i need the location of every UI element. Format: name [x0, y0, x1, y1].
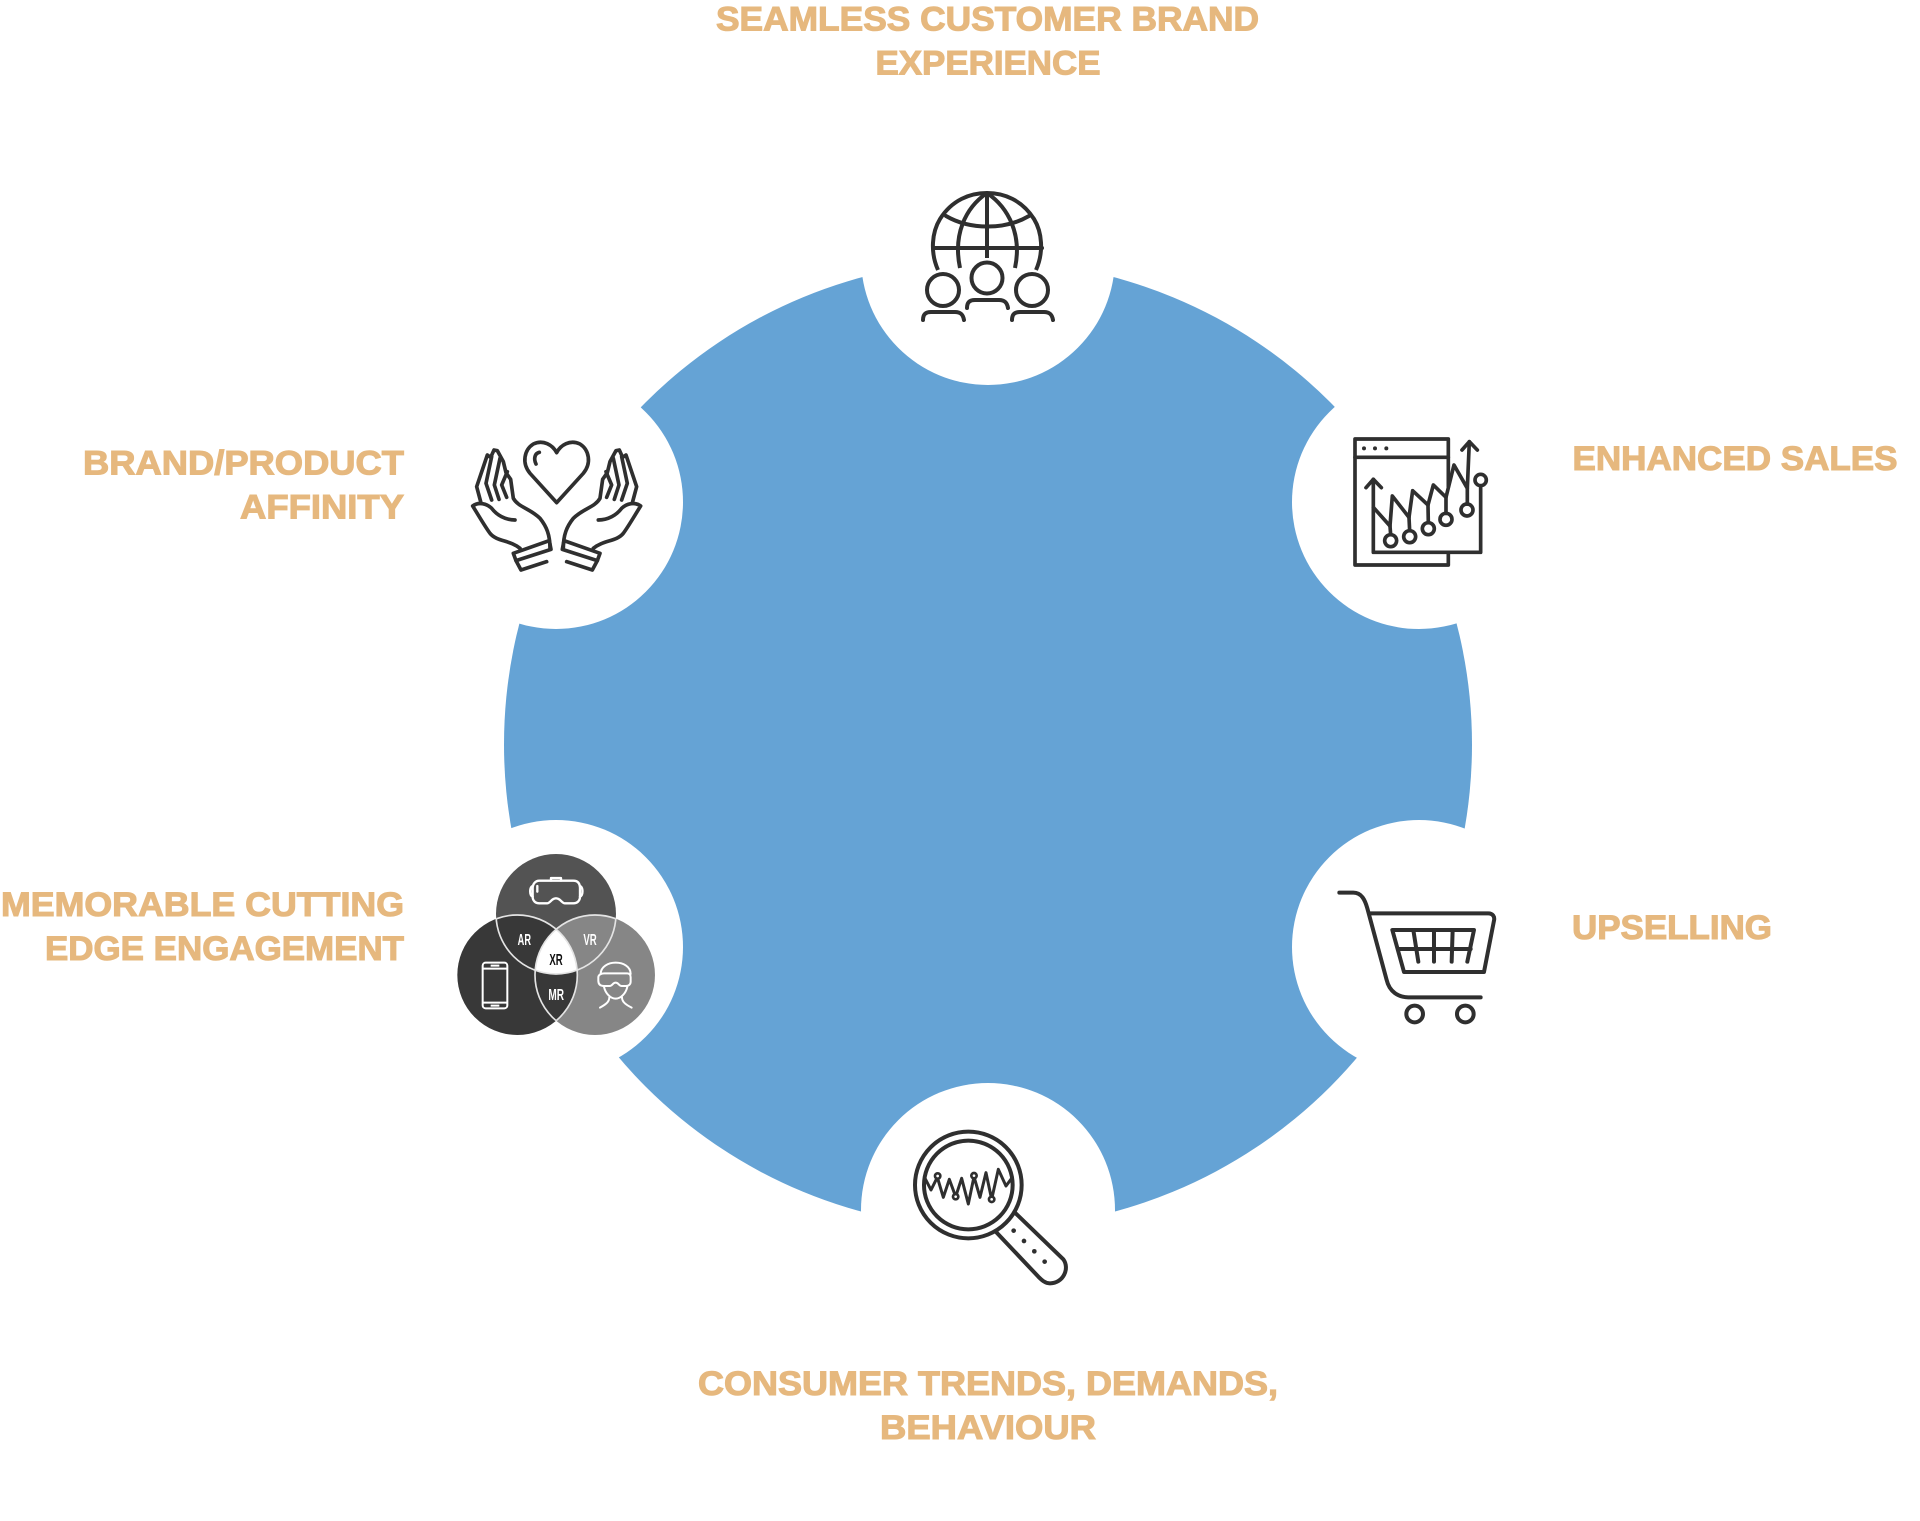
- label: memorable cutting edge engagement: [1, 886, 404, 968]
- venn labels: VR: [583, 932, 597, 949]
- venn labels: XR: [549, 952, 563, 969]
- icon: hands holding heart: [473, 442, 641, 570]
- venn labels: MR: [548, 987, 564, 1004]
- icon: XR venn diagram: [457, 854, 655, 1035]
- label: consumer trends, demands, behaviour: BEHAVIOUR: [880, 1409, 1096, 1447]
- label: consumer trends, demands, behaviour: [698, 1365, 1278, 1447]
- label: brand/product affinity: [83, 444, 404, 526]
- central blue notched circle: [429, 131, 1546, 1337]
- icon: globe with people: [923, 193, 1053, 320]
- label: seamless customer brand experience: EXPERIENCE: [876, 44, 1100, 82]
- icon: magnifier with waveform: [915, 1132, 1066, 1283]
- icon: shopping cart: [1339, 893, 1494, 1022]
- label: memorable cutting edge engagement: MEMORABLE CUTTING: [1, 886, 404, 924]
- label: brand/product affinity: BRAND/PRODUCT: [83, 444, 404, 482]
- label: memorable cutting edge engagement: EDGE ENGAGEMENT: [45, 930, 404, 968]
- icon: sales chart window: [1355, 439, 1486, 565]
- label: brand/product affinity: AFFINITY: [240, 488, 404, 526]
- label: enhanced sales: ENHANCED SALES: [1572, 440, 1898, 478]
- venn labels: AR: [518, 932, 531, 949]
- label: seamless customer brand experience: [716, 0, 1259, 82]
- label: upselling: UPSELLING: [1572, 909, 1772, 947]
- icon: smartphone: [483, 963, 507, 1008]
- icon: person wearing headset: [598, 963, 632, 1008]
- venn labels: [518, 932, 597, 1004]
- label: seamless customer brand experience: SEAMLESS CUSTOMER BRAND: [716, 0, 1259, 38]
- icon: VR headset: [530, 878, 582, 903]
- label: consumer trends, demands, behaviour: CONSUMER TRENDS, DEMANDS,: [698, 1365, 1278, 1403]
